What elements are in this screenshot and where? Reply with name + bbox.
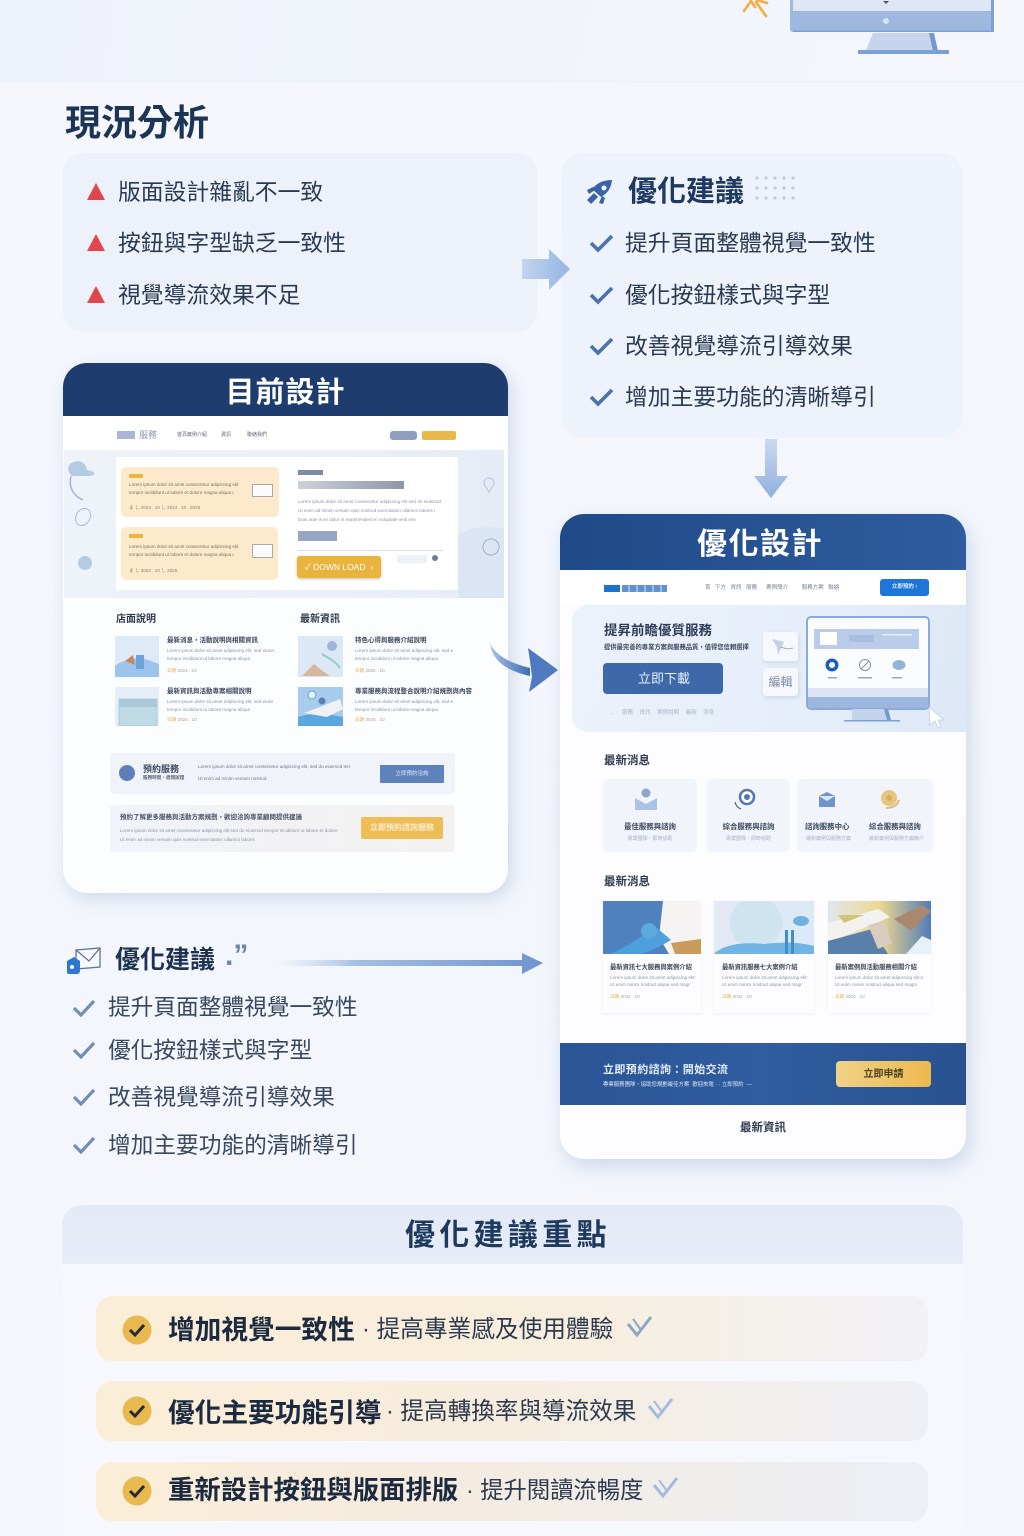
thumbnail 4 <box>298 687 343 726</box>
contact bar: 預約服務 <box>143 764 179 774</box>
header: optimized design: 優化設計 <box>697 528 823 561</box>
promo card 2: ま し 2024 . 10 し 2025 <box>129 568 177 573</box>
icon: decorative dots <box>756 176 794 200</box>
icon: mail person <box>635 788 657 810</box>
thumbnail 2 text: tempor incididunt ut labore magna aliqua <box>355 656 438 661</box>
promotion button: 立即預約諮詢服務 <box>370 823 434 832</box>
service card 3: 最新案例與服務方案簡介 <box>869 836 924 842</box>
news card 1 <box>603 901 701 1013</box>
header: key points <box>62 1205 963 1264</box>
news card 3: 最新案例與活動服務相關介紹 <box>835 964 917 971</box>
check badge <box>122 1396 152 1426</box>
suggestion 4: 增加主要功能的清晰導引 <box>625 384 876 410</box>
floating card 1 <box>763 632 798 661</box>
thumbnail 1 text: 日期 2024 . 10 <box>167 668 197 673</box>
news card 1: 最新資訊七大服務與案例介紹 <box>610 964 692 971</box>
decorative shapes left <box>68 461 94 570</box>
key point 3: 重新設計按鈕與版面排版 <box>168 1475 458 1505</box>
floating card 2 <box>763 668 798 696</box>
contact bar: 服務時間，週間辦理 <box>143 775 184 780</box>
key point 3: · 提升閱讀流暢度 <box>466 1477 643 1503</box>
thumbnail 1 <box>115 636 159 677</box>
thumbnail 2 text: 日期 2024 . 10 <box>355 668 385 673</box>
suggestion 3: 改善視覺導流引導效果 <box>108 1084 335 1110</box>
promotion bar: Lorem ipsum dolor sit amet consectetur adipiscing elit sed do eiusmod tempor incididunt ut labore et dolore <box>120 828 338 833</box>
suggestion 4: 增加主要功能的清晰導引 <box>108 1132 358 1158</box>
promo card 1: ま し 2024 . 10 し 2024 . 10 . 2025 <box>129 505 200 510</box>
section headings <box>116 613 340 625</box>
panel: optimized design mockup <box>560 514 966 1159</box>
thumbnail 3 <box>115 687 159 726</box>
news card 2: 最新資訊服務七大案例介紹 <box>722 964 798 971</box>
service card 2: 專業團隊，即時協助 <box>726 836 771 842</box>
section heading: news: 最新消息 <box>604 876 650 888</box>
service card 2 <box>707 779 790 852</box>
thumbnail 2 text: 特色心得與服務介紹說明 <box>355 637 426 644</box>
small action button <box>397 555 427 563</box>
image: blue landscape <box>714 901 814 954</box>
hero small button <box>298 531 337 541</box>
news card 3 <box>828 901 931 1013</box>
contact bar <box>110 753 455 794</box>
image: blue hand <box>603 901 701 954</box>
call to action band: 立即預約諮詢：開始交流 <box>603 1064 728 1076</box>
small action dot <box>432 555 438 561</box>
secondary suggestions block <box>67 939 358 1158</box>
icon: monitor <box>790 0 994 54</box>
key point 3 <box>96 1462 928 1521</box>
header: optimized design <box>560 514 966 570</box>
image: desk <box>828 901 931 954</box>
hero subtitle: 提供最完善的專業方案與服務品質，值得您信賴選擇 <box>604 644 749 651</box>
news card 2: 日期 2024 . 10 <box>722 994 752 999</box>
problem item 1: 版面設計雜亂不一致 <box>118 179 323 205</box>
suggestion 1: 提升頁面整體視覺一致性 <box>108 994 358 1020</box>
white hero content: Duis aute irure dolor in reprehenderit in voluptate velit esse <box>298 517 416 522</box>
arrow: current to optimized <box>490 644 558 692</box>
white hero content <box>116 457 458 590</box>
band button <box>836 1061 931 1087</box>
service card 2: 綜合服務與諮詢 <box>723 822 774 831</box>
section headings: 最新資訊 <box>300 614 340 625</box>
thumbnail 2 text <box>355 636 453 673</box>
top banner <box>0 0 1024 82</box>
thumbnail 4 text: tempor incididunt ut labore magna aliqua <box>355 707 438 712</box>
mockup navigation: 服務 <box>139 430 157 440</box>
hero button <box>603 663 723 694</box>
thumbnail 1 text: 最新消息，活動說明與相關資訊 <box>167 637 258 644</box>
button: download: ✓ DOWN LOAD › <box>305 562 373 572</box>
double check icon <box>647 1397 675 1423</box>
decorative shapes right <box>458 478 504 598</box>
heading: suggestions: 優化建議 <box>115 946 215 974</box>
service card 3: 諮詢服務中心 <box>805 822 849 831</box>
news card 1: 日期 2024 . 10 <box>610 994 640 999</box>
section headings: 店面說明 <box>116 614 156 625</box>
mockup navigation: 資訊 <box>221 432 231 438</box>
hero divider <box>298 550 443 551</box>
nav button <box>880 579 929 596</box>
hero button: 立即下載 <box>638 671 690 686</box>
suggestion 1: 提升頁面整體視覺一致性 <box>625 230 876 256</box>
service card 3: 最新案例與服務方案 <box>806 836 851 842</box>
panel: current design mockup <box>63 363 508 893</box>
arrow: suggestions to optimized design <box>290 953 543 974</box>
key point 2: 優化主要功能引導 <box>168 1398 382 1428</box>
icon: gold coin <box>881 790 900 809</box>
service card 3 <box>797 779 933 852</box>
hero small links: ← 服務 資訊 案例說明 最新 消息 <box>610 710 714 716</box>
thumbnail 4 text: 專業服務與流程整合說明介紹規劃與內容 <box>355 688 472 695</box>
header: key points: 優化建議重點 <box>405 1219 611 1252</box>
band button: 立即申請 <box>864 1069 904 1080</box>
key point 1 <box>96 1296 928 1361</box>
hero title: 提昇前瞻優質服務 <box>604 623 712 638</box>
double check icon <box>626 1315 654 1341</box>
news card 3: Ut enim minim nostrud aliqua sed magna <box>835 982 917 987</box>
icon: quote mark: .” <box>225 939 248 972</box>
hero tag <box>298 470 323 475</box>
heading: suggestions: 優化建議 <box>628 176 744 208</box>
arrow: suggestions to optimized design <box>754 439 788 498</box>
title: current analysis: 現況分析 <box>65 102 209 143</box>
illustration: monitor <box>806 616 945 728</box>
mockup hero section <box>64 450 504 598</box>
mockup hero <box>572 605 966 732</box>
panel: current problems <box>63 153 537 332</box>
floating card 2: 編輯 <box>768 675 792 689</box>
news card 3: 日期 2024 . 10 <box>835 994 865 999</box>
contact icon <box>119 765 135 781</box>
promo card 2 <box>121 527 278 580</box>
panel: key points <box>62 1205 963 1536</box>
service card 1 <box>603 779 697 852</box>
icon: mail <box>67 947 101 974</box>
key point 1: 增加視覺一致性 <box>168 1315 355 1345</box>
check badge <box>122 1476 152 1506</box>
thumbnail 4 text <box>355 687 472 722</box>
call to action band <box>560 1043 966 1105</box>
thumbnail 1 text <box>167 636 275 673</box>
thumbnail 3 text <box>167 687 273 722</box>
thumbnail 3 text: tempor incididunt ut labore magna aliqua <box>167 707 250 712</box>
thumbnail 4 text: 日期 2024 . 10 <box>355 717 385 722</box>
thumbnail 3 text: 最新資訊與活動專案相關說明 <box>167 688 252 695</box>
call to action band: 專業服務團隊，協助您規劃最佳方案 歡迎來電 · · 立即預約 — <box>603 1082 752 1088</box>
thumbnail 2 <box>298 636 343 677</box>
icon: sparkle <box>742 0 768 18</box>
thumbnail 1 text: tempor incididunt ut labore magna aliqua <box>167 656 250 661</box>
contact button <box>380 765 444 783</box>
icon: pin <box>734 788 756 810</box>
suggestion 2: 優化按鈕樣式與字型 <box>625 282 830 308</box>
double check icon <box>652 1476 680 1502</box>
problem item 3: 視覺導流效果不足 <box>118 282 300 308</box>
mockup navigation <box>63 416 508 450</box>
service card 1: 專業團隊，即時協助 <box>627 836 672 842</box>
key point 2: · 提高轉換率與導流效果 <box>386 1399 636 1425</box>
promotion button <box>361 817 443 839</box>
promotion bar <box>110 805 455 852</box>
suggestion 3: 改善視覺導流引導效果 <box>625 333 853 359</box>
promotion bar: Ut enim ad minim veniam quis nostrud exercitation ullamco laboris <box>120 837 255 842</box>
hero title bar <box>298 481 404 489</box>
icon: envelope <box>819 792 835 807</box>
contact bar: Ut enim ad minim veniam nostrud <box>198 776 266 781</box>
arrow: problems to suggestions <box>522 249 570 290</box>
thumbnail 3 text: 日期 2024 . 10 <box>167 717 197 722</box>
suggestion 2: 優化按鈕樣式與字型 <box>108 1037 312 1063</box>
button: download <box>297 556 381 578</box>
key point 2 <box>96 1381 928 1441</box>
problem item 2: 按鈕與字型缺乏一致性 <box>118 230 346 256</box>
section heading: latest info: 最新消息 <box>604 755 650 767</box>
promotion bar: 預約了解更多服務與活動方案規劃，歡迎洽詢專業顧問提供建議 <box>120 814 302 821</box>
mockup navigation <box>560 570 966 604</box>
footer label: 最新資訊 <box>740 1122 786 1134</box>
service card 3: 綜合服務與諮詢 <box>869 822 921 831</box>
check badge <box>122 1315 152 1345</box>
key point 1: · 提高專業感及使用體驗 <box>362 1317 613 1343</box>
icon: rocket <box>587 180 612 204</box>
mockup navigation: 首頁案例介紹 <box>177 432 207 438</box>
news card 2 <box>714 901 814 1013</box>
mockup navigation: 聯絡我們 <box>247 432 267 438</box>
service card 1: 最佳服務與諮詢 <box>624 822 676 831</box>
contact button: 立即預約洽詢 <box>395 771 428 777</box>
nav button: 立即預約 › <box>892 584 917 590</box>
promo card 1 <box>121 467 279 517</box>
panel: suggestions <box>561 153 963 438</box>
header: current design <box>63 363 508 416</box>
header: current design: 目前設計 <box>225 377 346 409</box>
mockup navigation: 首 下方 資訊 服務 案例簡介 服務方案 聯絡 <box>705 585 839 591</box>
